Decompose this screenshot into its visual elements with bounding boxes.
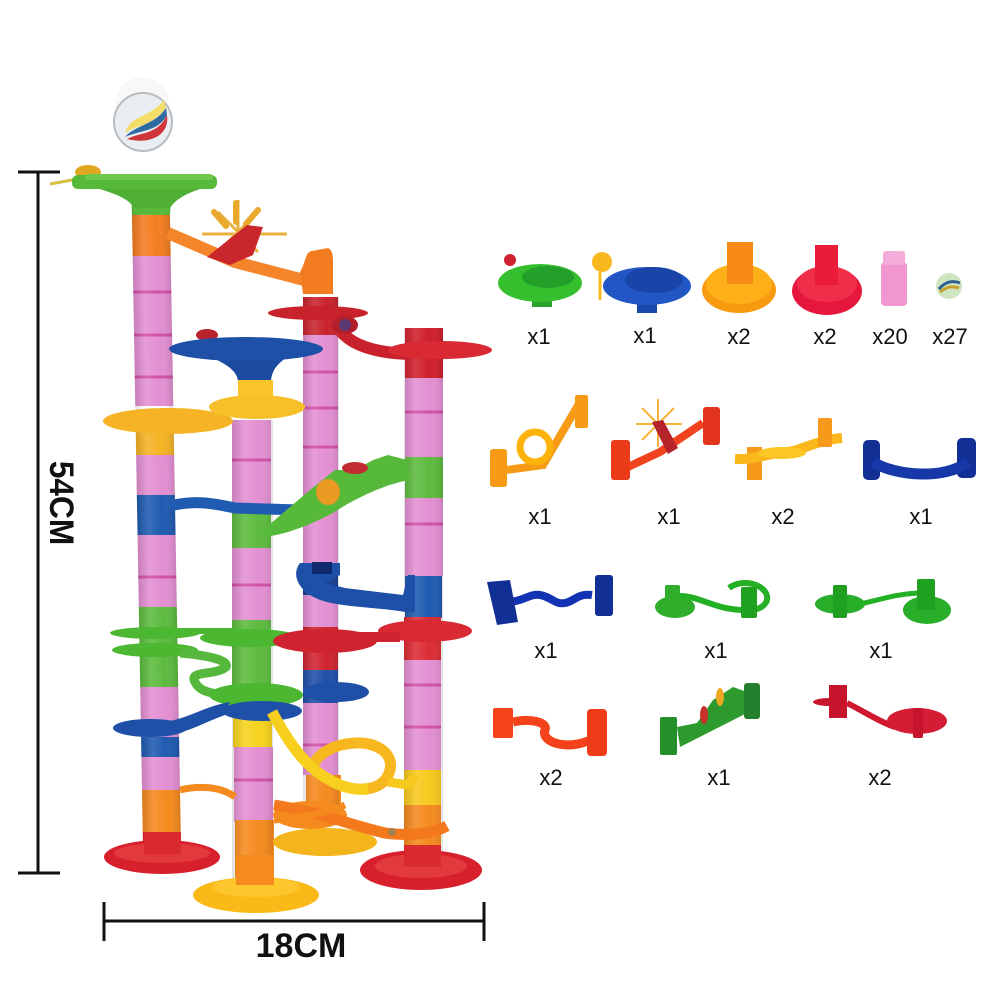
part: blue platform [592, 252, 691, 313]
label: x2 [727, 324, 751, 349]
column 1 [132, 200, 181, 860]
column 2 [232, 420, 274, 882]
red spiral track top [268, 306, 492, 359]
yellow loop track [272, 712, 416, 789]
blue platforms low [113, 682, 369, 737]
blue connector beam [170, 503, 300, 510]
parts row 3 [487, 575, 951, 663]
parts row 2 [490, 395, 976, 529]
dimension: width 18CM [104, 902, 484, 965]
label: x2 [813, 324, 837, 349]
blue s-curve track [296, 562, 415, 612]
parts row 1 [498, 242, 968, 349]
part: orange-yellow base [702, 242, 776, 313]
part: yellow s-track [735, 418, 842, 480]
label: x1 [527, 324, 551, 349]
label: x1 [633, 323, 657, 348]
green wavy ramp [263, 455, 410, 537]
part: navy wavy track [487, 575, 613, 625]
label: x20 [872, 324, 908, 349]
dimension: width 18CM: 18CM [256, 927, 346, 965]
part: green platform [498, 254, 582, 307]
blue platform [169, 329, 323, 381]
label: x1 [657, 504, 681, 529]
top green platform with marble stub [50, 165, 217, 214]
label: x1 [909, 504, 933, 529]
label: x1 [534, 638, 558, 663]
dimension: height 54CM: 54CM [43, 461, 81, 545]
label: x2 [771, 504, 795, 529]
part: red spiral track [813, 685, 947, 738]
marble on top [114, 77, 172, 151]
part: red base [792, 245, 862, 315]
yellow platforms [103, 380, 305, 434]
part: green spiral track [655, 583, 767, 618]
part: green spiral track mirrored [815, 579, 951, 624]
marble run tower [50, 165, 492, 913]
part: orange-red track [493, 708, 607, 756]
part: red ramp with wheel [611, 399, 720, 480]
base plates [104, 828, 482, 913]
part: marble [936, 273, 962, 299]
label: x2 [539, 765, 563, 790]
orange ramp with waterwheel [168, 200, 333, 294]
column 4 [404, 328, 443, 868]
part: orange loop ramp [490, 395, 588, 487]
column 3 [303, 297, 341, 810]
dimension: height 54CM [18, 172, 81, 873]
part: green wavy ramp [660, 683, 760, 755]
part: pink tube [881, 251, 907, 306]
label: x1 [528, 504, 552, 529]
orange lower tracks [180, 787, 447, 836]
label: x2 [868, 765, 892, 790]
label: x27 [932, 324, 968, 349]
label: x1 [704, 638, 728, 663]
label: x1 [707, 765, 731, 790]
parts row 4 [493, 683, 947, 790]
label: x1 [869, 638, 893, 663]
red platform and track [273, 620, 472, 653]
part: navy bridge [863, 438, 976, 480]
green platforms mid [110, 627, 303, 707]
